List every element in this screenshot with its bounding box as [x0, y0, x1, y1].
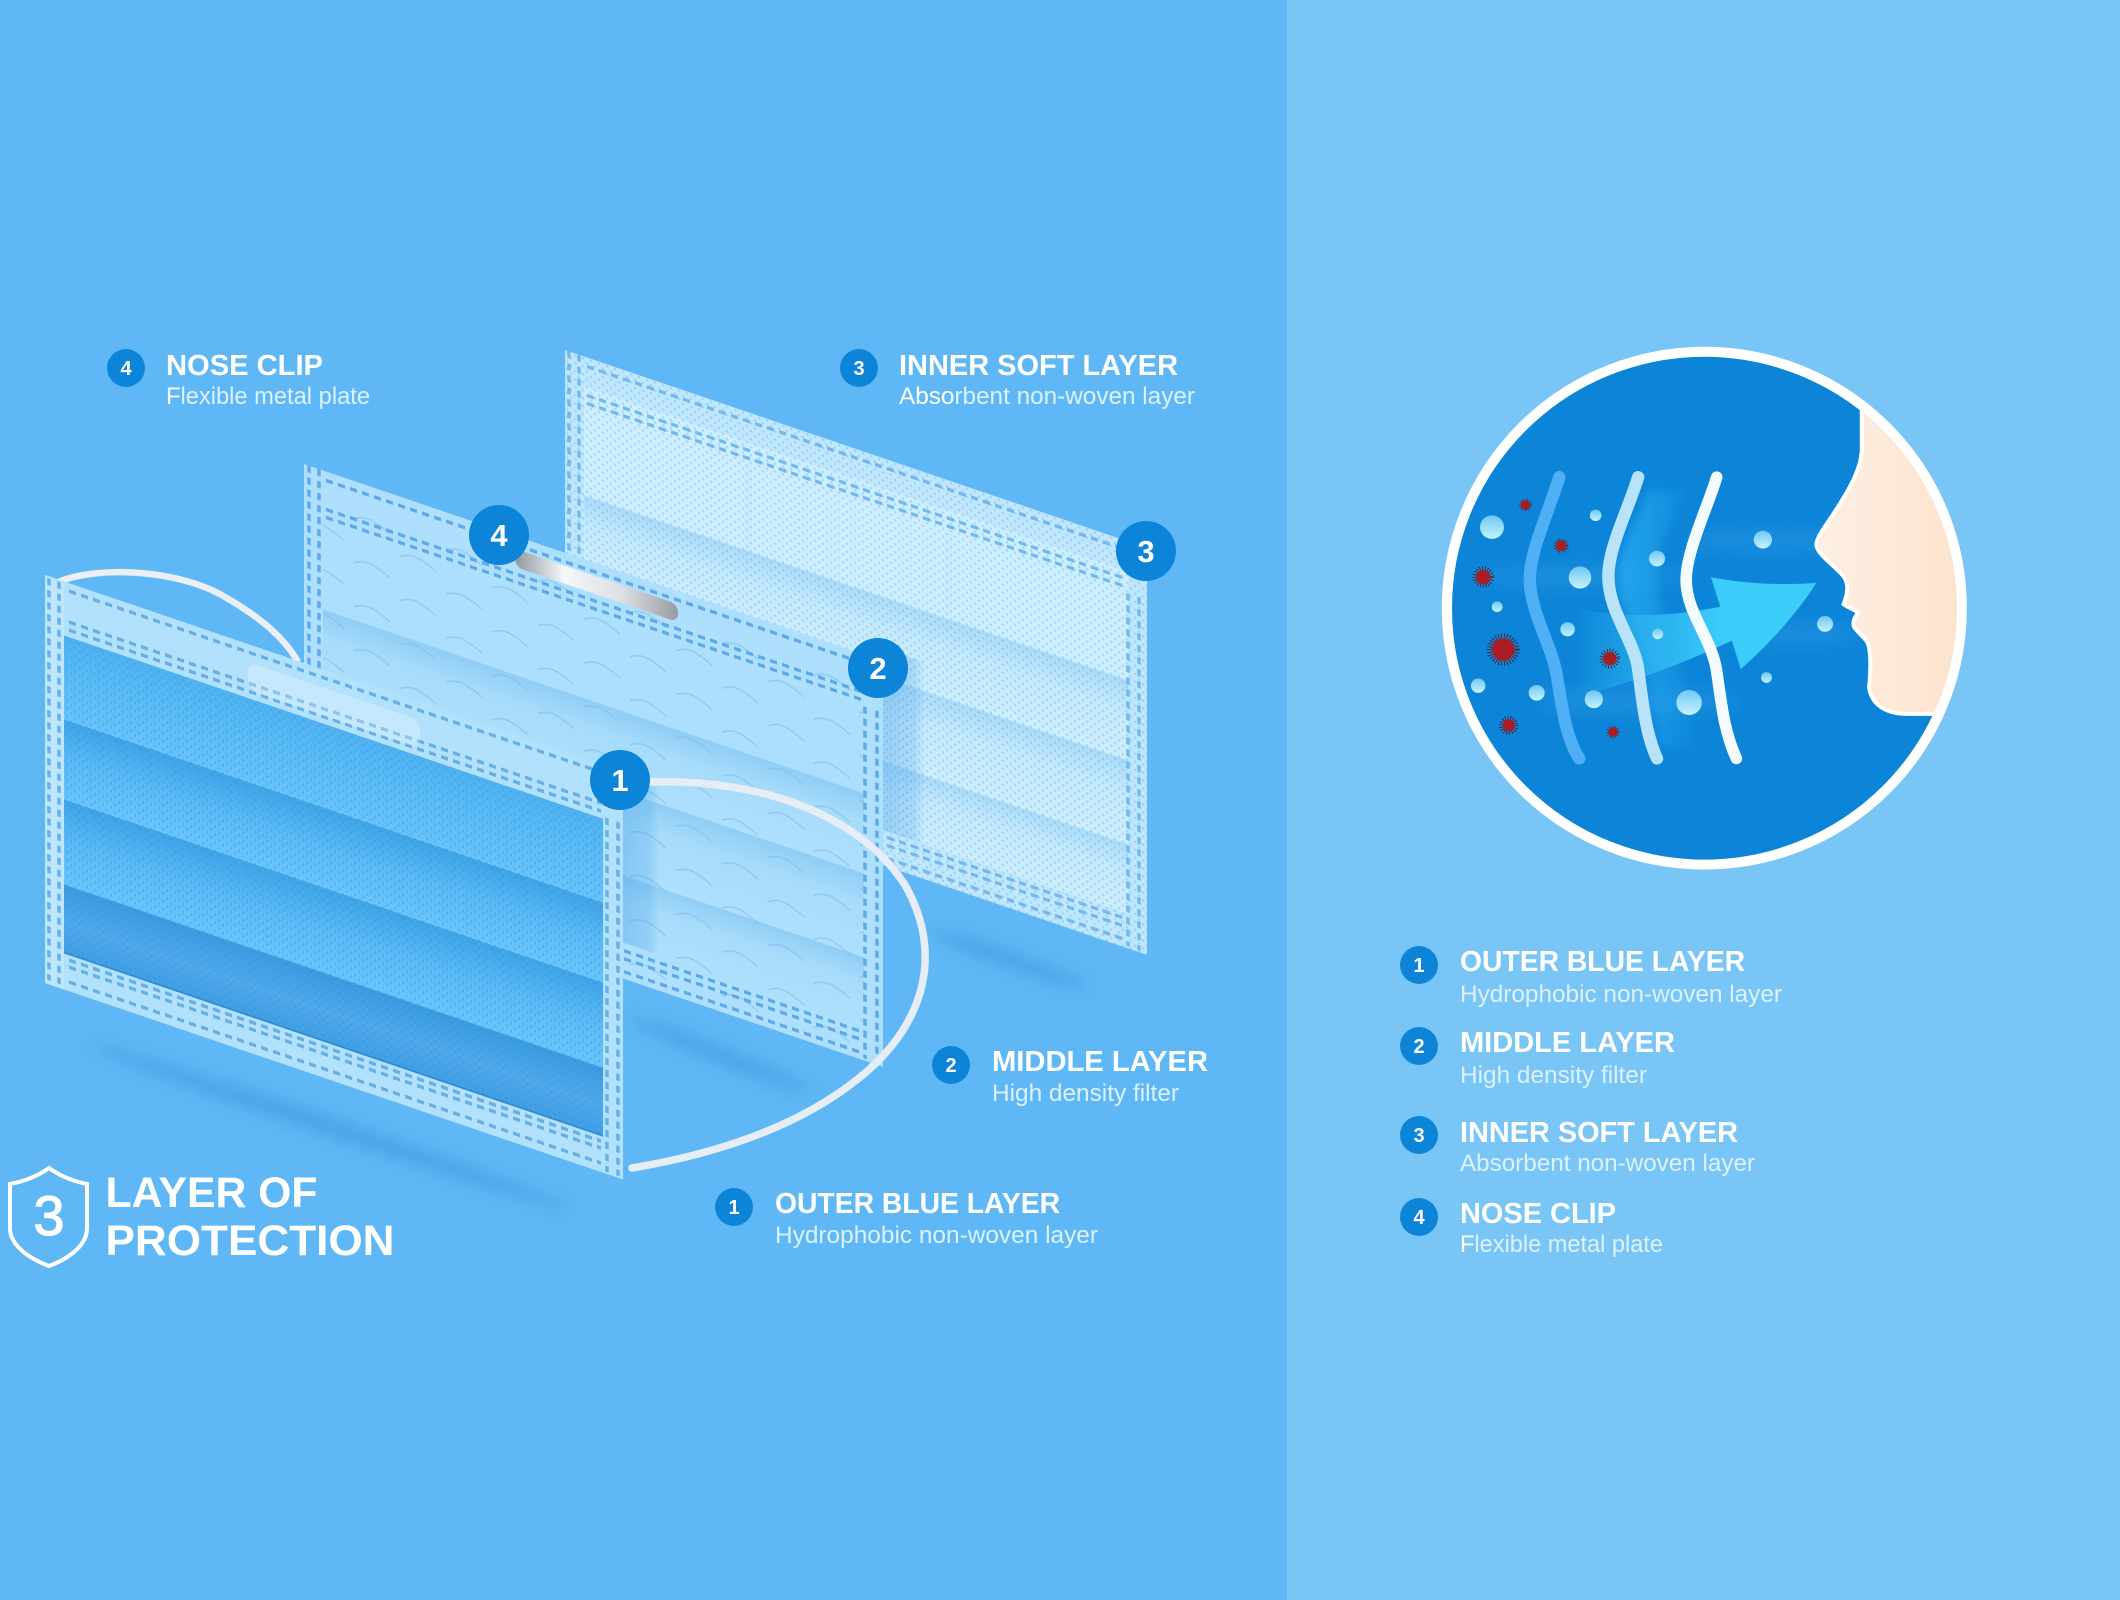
nose clip metal plate [515, 549, 678, 622]
viruses [1475, 500, 1618, 737]
marker 1 [590, 750, 650, 810]
filter glow [1616, 490, 1680, 746]
filter curve 1 [1530, 477, 1579, 759]
icon: shield with 3 [10, 1168, 87, 1266]
legend item 1: Hydrophobic non-woven layer [1460, 981, 1782, 1008]
panel: right background [1287, 0, 2120, 1600]
bubbles [1471, 510, 1833, 715]
label: nose clip: 4 [120, 358, 132, 380]
label: middle layer: High density filter [992, 1080, 1179, 1107]
label: inner soft layer: 3 [853, 358, 865, 380]
label: outer blue layer: 1 [728, 1197, 740, 1219]
label: inner soft layer [840, 349, 1195, 410]
illustration: breathing through filter [1447, 352, 2002, 865]
icon: shield with 3: 3 [33, 1184, 65, 1247]
face profile [1814, 410, 1957, 716]
panel: left background [0, 0, 1287, 1600]
label: middle layer: 2 [945, 1055, 957, 1077]
arrow [1588, 577, 1816, 691]
legend item 4: Flexible metal plate [1460, 1231, 1663, 1258]
label: outer blue layer: Hydrophobic non-woven layer [775, 1222, 1098, 1249]
label: middle layer: MIDDLE LAYER [992, 1046, 1208, 1078]
left ear loop [58, 572, 297, 660]
marker 2 [848, 638, 908, 698]
marker 2: 2 [869, 651, 887, 686]
middle filter mask layer [304, 464, 883, 1067]
soft air wisps [1502, 531, 1843, 712]
legend item 4 [1400, 1198, 1663, 1258]
legend item 2: 2 [1413, 1036, 1425, 1058]
marker 3: 3 [1137, 534, 1155, 569]
title [106, 1169, 394, 1265]
legend item 2: MIDDLE LAYER [1460, 1027, 1675, 1059]
marker 3 [1116, 521, 1176, 581]
legend item 2: High density filter [1460, 1062, 1647, 1089]
marker 4 [469, 505, 529, 565]
right ear loop [632, 782, 925, 1168]
label: outer blue layer [715, 1188, 1098, 1249]
label: inner soft layer: Absorbent non-woven layer [899, 383, 1195, 410]
marker 1: 1 [611, 763, 629, 798]
inner soft mask layer [565, 350, 1147, 955]
label: nose clip: Flexible metal plate [166, 383, 370, 410]
legend item 3: INNER SOFT LAYER [1460, 1117, 1738, 1149]
label: nose clip: NOSE CLIP [166, 350, 323, 382]
label: middle layer [932, 1046, 1208, 1107]
legend item 2 [1400, 1027, 1675, 1089]
legend item 3: 3 [1413, 1125, 1425, 1147]
title: LAYER OF [106, 1169, 318, 1217]
legend item 3: Absorbent non-woven layer [1460, 1150, 1755, 1177]
legend item 4: NOSE CLIP [1460, 1198, 1616, 1230]
filter curve 3 [1686, 477, 1736, 759]
label: inner soft layer: INNER SOFT LAYER [899, 350, 1178, 382]
title: PROTECTION [106, 1217, 394, 1265]
legend item 1: 1 [1413, 955, 1425, 977]
legend item 4: 4 [1413, 1207, 1425, 1229]
nose clip pocket [248, 662, 420, 748]
filter curve 2 [1608, 477, 1657, 759]
marker 4: 4 [490, 518, 508, 553]
label: outer blue layer: OUTER BLUE LAYER [775, 1188, 1060, 1220]
legend item 1: OUTER BLUE LAYER [1460, 946, 1745, 978]
legend item 3 [1400, 1116, 1755, 1177]
ground shadows [86, 924, 1092, 1217]
outer blue mask layer [45, 575, 623, 1180]
label: nose clip [107, 349, 370, 410]
legend item 1 [1400, 946, 1782, 1008]
